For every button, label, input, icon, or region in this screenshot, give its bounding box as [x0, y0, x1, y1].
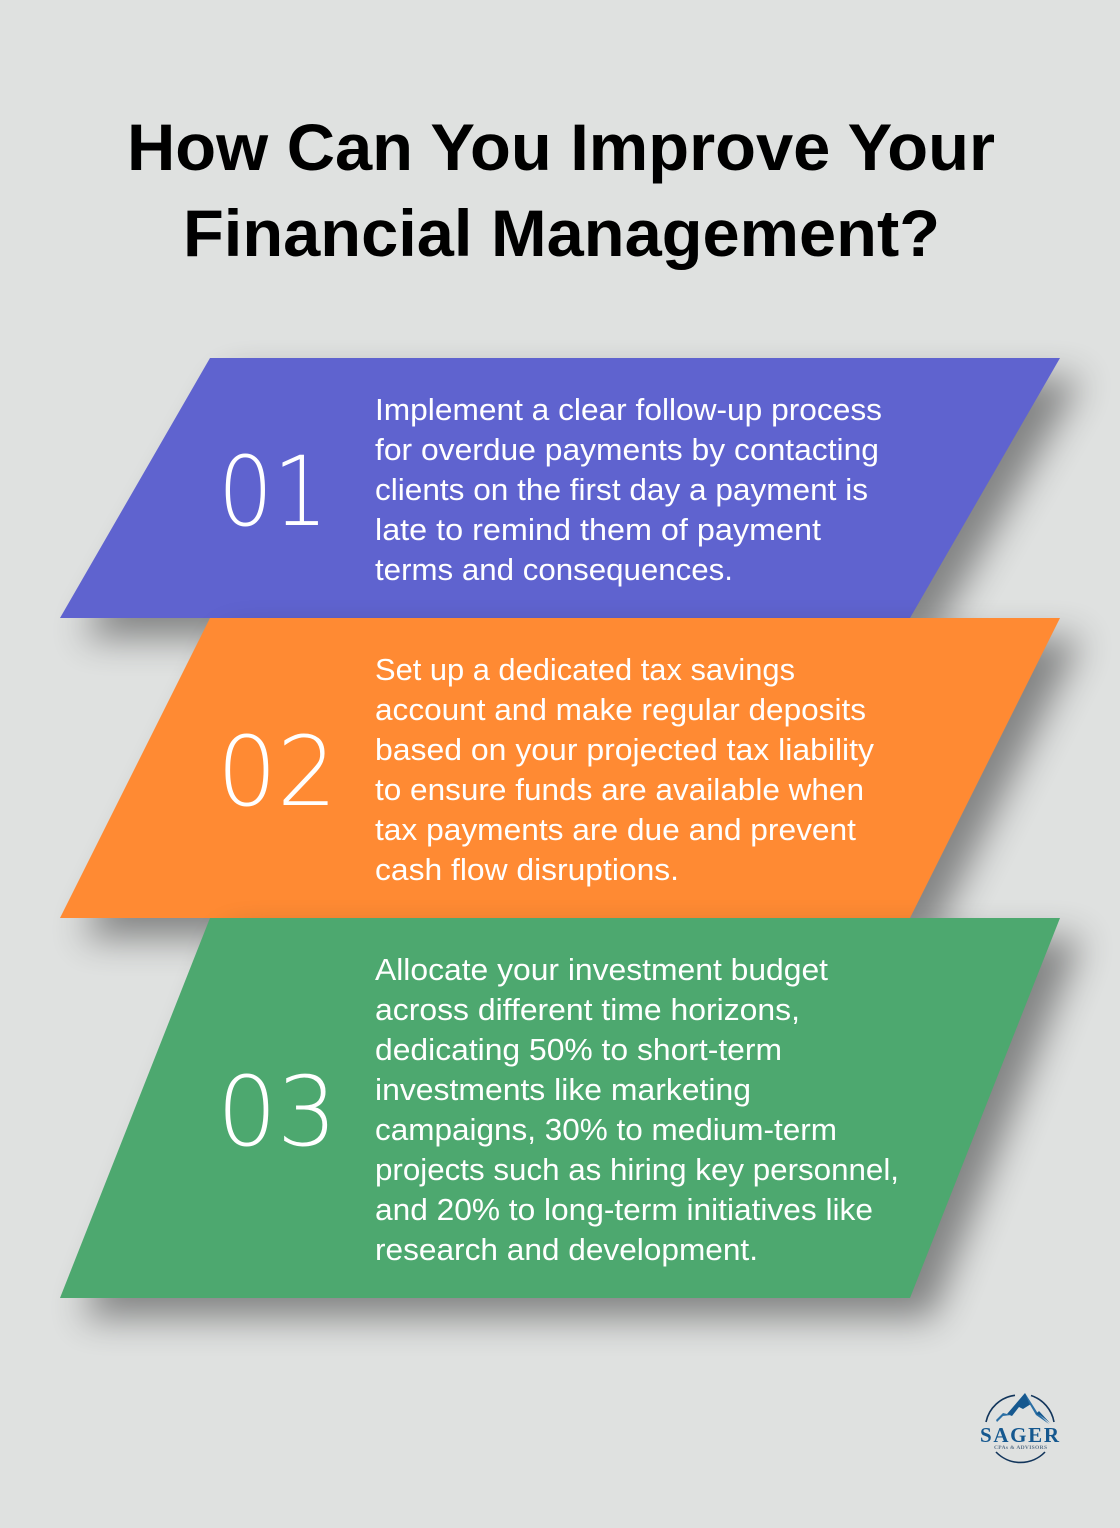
text block: step 01: clients on the first day a payment is: [375, 473, 868, 507]
number: 02: 02: [217, 716, 337, 828]
text block: step 03: projects such as hiring key personnel,: [375, 1153, 899, 1187]
text block: step 02: tax payments are due and prevent: [375, 813, 857, 847]
text block: step 03: dedicating 50% to short-term: [375, 1033, 782, 1067]
text block: step 01: Implement a clear follow-up process: [375, 393, 882, 427]
text block: step 02: [375, 653, 875, 887]
logo wordmark: SAGER: [980, 1423, 1060, 1447]
text block: step 02: Set up a dedicated tax savings: [375, 653, 795, 687]
title: How Can You Improve Your: [127, 110, 995, 184]
number: 01: 01: [218, 436, 328, 548]
text block: step 02: cash flow disruptions.: [375, 853, 679, 887]
text block: step 02: account and make regular deposits: [375, 693, 866, 727]
text block: step 02: to ensure funds are available when: [375, 773, 864, 807]
text block: step 03: across different time horizons,: [375, 993, 800, 1027]
text block: step 02: based on your projected tax liability: [375, 733, 875, 767]
text block: step 01: [375, 393, 882, 587]
text block: step 01: late to remind them of payment: [375, 513, 822, 547]
parallelogram: step 03 background: [60, 918, 1060, 1298]
panel: step 01: [60, 358, 1082, 638]
text block: step 03: and 20% to long-term initiatives like: [375, 1193, 873, 1227]
title: [127, 110, 995, 270]
text block: step 03: campaigns, 30% to medium-term: [375, 1113, 837, 1147]
text block: step 01: for overdue payments by contacting: [375, 433, 879, 467]
number: 03: 03: [217, 1056, 337, 1168]
logo: Sager CPAs & Advisors: [980, 1393, 1060, 1462]
icon: circle arcs: [986, 1395, 1054, 1462]
parallelogram: step 02 background: [60, 618, 1060, 918]
text block: step 03: Allocate your investment budget: [375, 953, 829, 987]
text block: step 01: terms and consequences.: [375, 553, 733, 587]
parallelogram: step 01 background: [60, 358, 1060, 618]
icon: mountain: [996, 1393, 1050, 1424]
panel: step 02: [60, 618, 1082, 938]
text block: step 03: research and development.: [375, 1233, 758, 1267]
title: Financial Management?: [183, 196, 940, 270]
panel: step 03: [60, 918, 1082, 1318]
logo tagline: CPAs & ADVISORS: [994, 1445, 1047, 1451]
text block: step 03: investments like marketing: [375, 1073, 751, 1107]
text block: step 03: [375, 953, 899, 1267]
